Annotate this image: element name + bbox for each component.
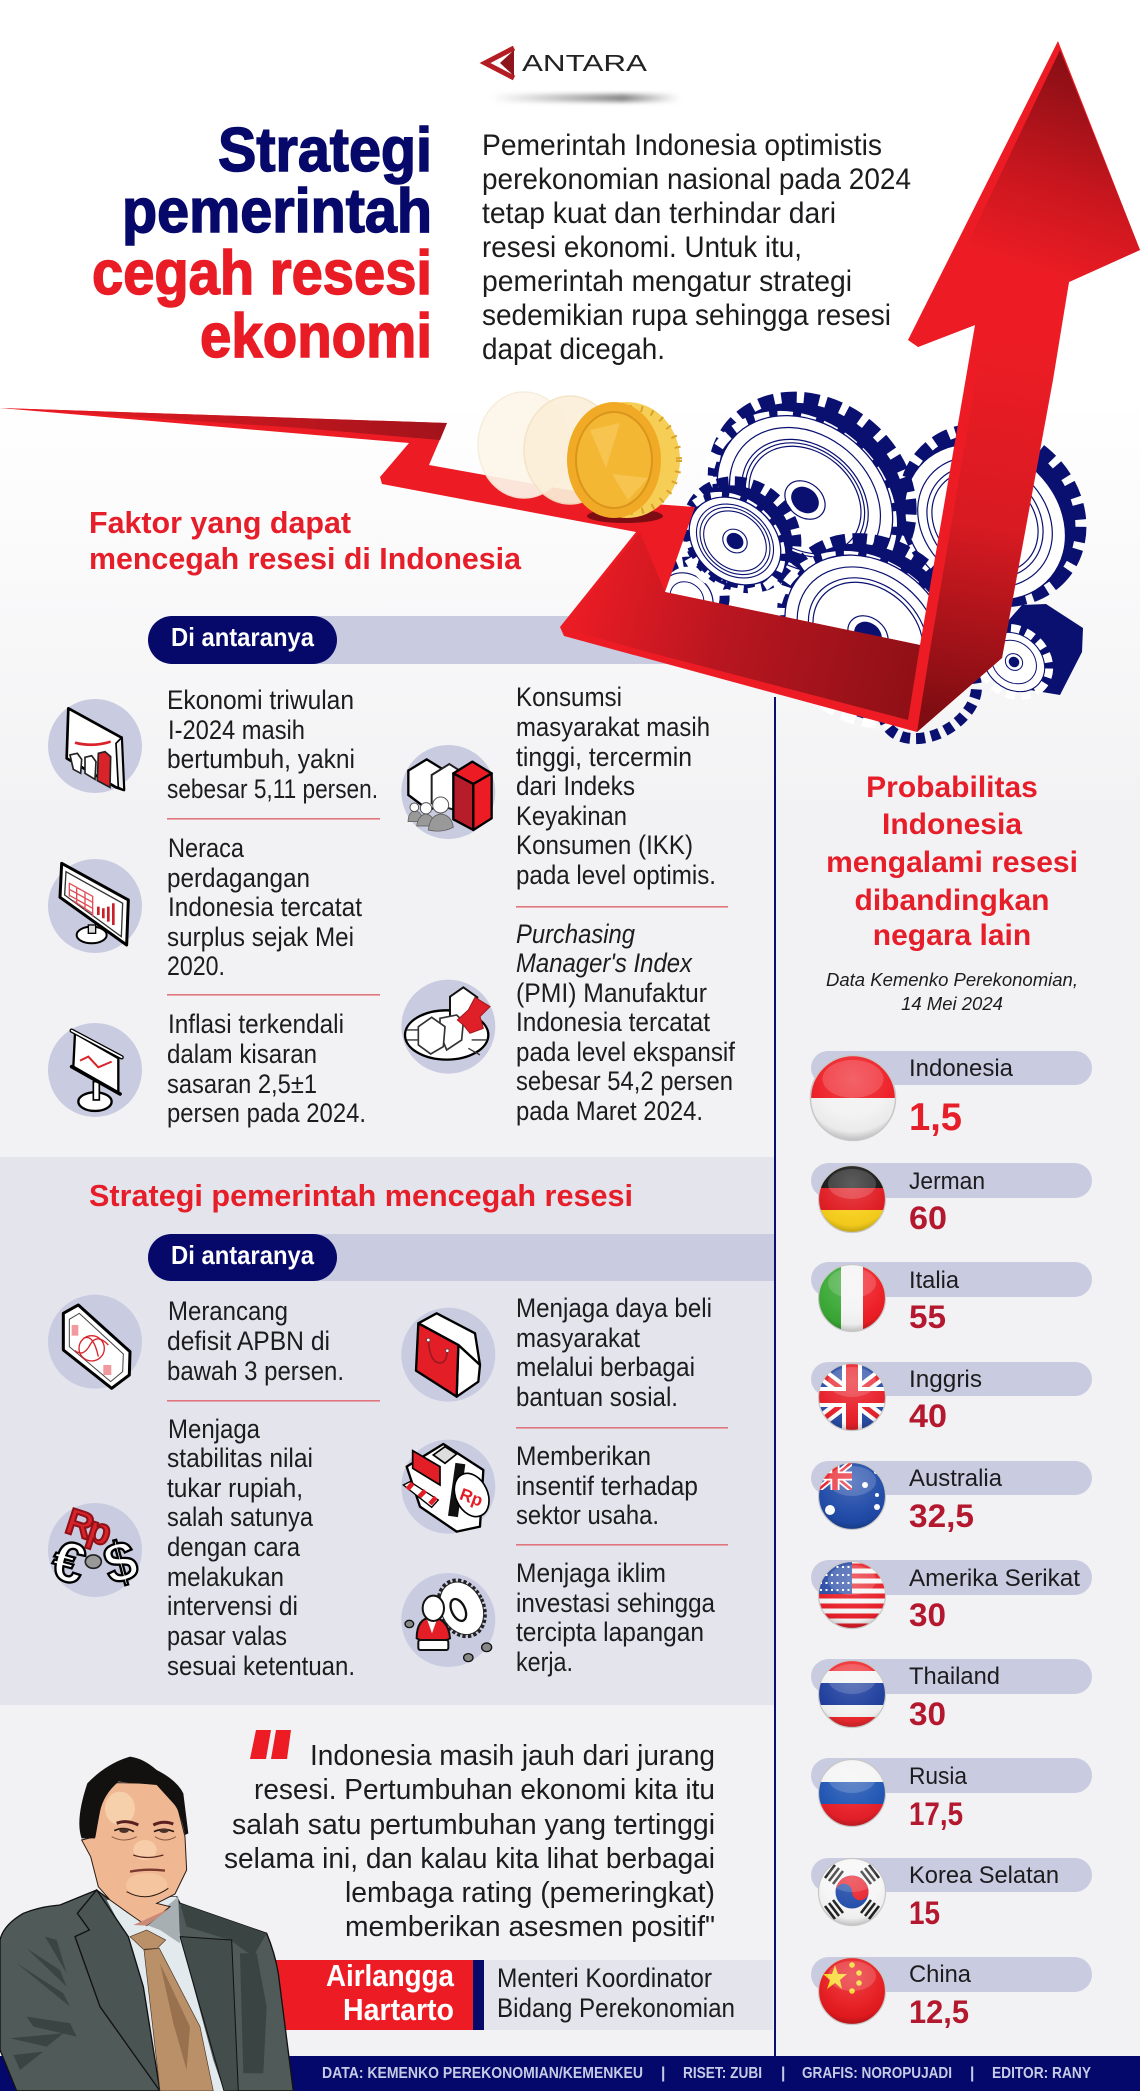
- row: Inggris: 40: [909, 1398, 947, 1434]
- band: Di antaranya (strategy): [148, 1234, 774, 1281]
- icon: investor and gear: [401, 1573, 495, 1667]
- panel: name plate: Bidang Perekonomian: [497, 1993, 735, 2023]
- coins: [478, 392, 680, 523]
- tie: [130, 1930, 213, 2091]
- flag: Germany: [818, 1165, 886, 1233]
- panel: name plate: [270, 1958, 773, 2030]
- text: investment: [516, 1558, 715, 1677]
- intro text: sedemikian rupa sehingga resesi: [482, 299, 891, 332]
- quote text: Indonesia masih jauh dari jurang: [310, 1740, 715, 1772]
- gear: right large: [870, 396, 1113, 636]
- row: Amerika Serikat: Amerika Serikat: [909, 1565, 1080, 1592]
- quote text: [224, 1740, 715, 1943]
- eyebrows: [117, 1822, 173, 1825]
- arrow band shading: [562, 532, 920, 720]
- text: PMI: sebesar 54,2 persen: [516, 1066, 733, 1096]
- shirt: [107, 1897, 224, 2091]
- quote text: resesi. Pertumbuhan ekonomi kita itu: [254, 1774, 715, 1806]
- row: Korea Selatan: Korea Selatan: [909, 1862, 1059, 1889]
- gear: small left: [647, 548, 738, 638]
- faded coin 1: [478, 392, 570, 498]
- row: China: China: [909, 1961, 972, 1988]
- row: Korea Selatan: [811, 1858, 1092, 1931]
- text: trade balance: perdagangan: [167, 863, 310, 893]
- text: inflation: persen pada 2024.: [167, 1098, 366, 1128]
- intro text: Pemerintah Indonesia optimistis: [482, 129, 882, 162]
- title: ekonomi: [200, 302, 432, 371]
- quote text: memberikan asesmen positif": [345, 1911, 715, 1943]
- text: exchange rate: intervensi di: [167, 1591, 298, 1621]
- data source note: [826, 969, 1078, 1014]
- text: exchange rate: stabilitas nilai: [167, 1443, 313, 1473]
- row: Rusia: [811, 1758, 1092, 1832]
- text: incentive: insentif terhadap: [516, 1471, 698, 1501]
- text: purchasing power: masyarakat: [516, 1323, 641, 1353]
- text: inflation: sasaran 2,5±1: [167, 1069, 317, 1099]
- text: PMI: pada Maret 2024.: [516, 1096, 703, 1126]
- text: PMI: Purchasing: [516, 919, 635, 949]
- text: PMI: Indonesia tercatat: [516, 1007, 711, 1037]
- gears illustration: [647, 362, 1113, 762]
- gear: left medium: [661, 461, 815, 614]
- icon: currencies: [45, 1500, 144, 1598]
- text: purchasing power: melalui berbagai: [516, 1352, 695, 1382]
- row: China: 12,5: [909, 1994, 969, 2030]
- hair: [79, 1757, 188, 1838]
- ANTARA logo: [462, 34, 680, 102]
- panel: strategy background: [0, 1157, 775, 1705]
- text: consumption: Konsumsi: [516, 682, 622, 712]
- portrait: Airlangga Hartarto: [0, 1757, 293, 2091]
- text: investment: tercipta lapangan: [516, 1617, 704, 1647]
- panel: name plate: Menteri Koordinator: [497, 1963, 712, 1993]
- arrow tail shading: [0, 408, 447, 440]
- intro text: pemerintah mengatur strategi: [482, 265, 852, 298]
- row: Inggris: [811, 1362, 1092, 1434]
- text: inflation: dalam kisaran: [167, 1039, 317, 1069]
- flag: Thailand: [818, 1660, 886, 1728]
- title: Strategi: [218, 116, 432, 185]
- text: investment: investasi sehingga: [516, 1588, 715, 1618]
- text: exchange rate: dengan cara: [167, 1532, 300, 1562]
- flag: Russia: [818, 1759, 886, 1827]
- title: cegah resesi: [92, 239, 432, 308]
- band: Di antaranya (factors): Di antaranya: [171, 622, 314, 652]
- text: growth: I-2024 masih: [168, 715, 305, 745]
- text: deficit: bawah 3 persen.: [167, 1356, 344, 1386]
- text: exchange rate: [167, 1414, 355, 1681]
- row: Indonesia: [810, 1051, 1092, 1141]
- data source note: Data Kemenko Perekonomian,: [826, 969, 1078, 990]
- text: consumption: dari Indeks: [516, 771, 635, 801]
- arrow silhouette: [0, 41, 1140, 732]
- text: exchange rate: pasar valas: [167, 1621, 287, 1651]
- gear: bottom right small: [966, 604, 1083, 710]
- row: Jerman: 60: [909, 1200, 947, 1236]
- icon: PMI chart: [401, 980, 495, 1074]
- icon: consumer boxes: [401, 745, 495, 839]
- band: Di antaranya (factors): [148, 616, 680, 664]
- row: Indonesia: Indonesia: [909, 1055, 1014, 1082]
- neck and face: [82, 1783, 187, 1926]
- arrow head shading: [918, 50, 1140, 347]
- heading: probability: negara lain: [873, 919, 1031, 952]
- text: deficit: defisit APBN di: [167, 1326, 330, 1356]
- flag: Australia: [818, 1462, 886, 1530]
- quote text: salah satu pertumbuhan yang tertinggi: [232, 1809, 715, 1841]
- footer bar: |: [970, 2065, 974, 2082]
- icon: monitor: [48, 859, 142, 953]
- text: purchasing power: [516, 1293, 712, 1412]
- text: exchange rate: sesuai ketentuan.: [167, 1651, 355, 1681]
- text: consumption: [516, 682, 716, 890]
- text: growth: Ekonomi triwulan: [167, 685, 354, 715]
- row: Australia: [811, 1461, 1092, 1534]
- text: exchange rate: salah satunya: [167, 1502, 313, 1532]
- red arrow: [0, 41, 1140, 732]
- lapel right: [180, 1937, 238, 2091]
- band: Di antaranya (strategy): Di antaranya: [171, 1240, 314, 1270]
- text: PMI: pada level ekspansif: [516, 1037, 736, 1067]
- text: investment: Menjaga iklim: [516, 1558, 666, 1588]
- ANTARA logo: ANTARA: [522, 50, 648, 76]
- eyes: [114, 1829, 174, 1832]
- quote mark: [250, 1730, 291, 1759]
- footer bar: |: [781, 2065, 785, 2082]
- text: consumption: pada level optimis.: [516, 860, 716, 890]
- gear: under band: [870, 646, 990, 754]
- faded coin 2: [524, 396, 616, 504]
- text: consumption: Keyakinan: [516, 801, 627, 831]
- quote text: lembaga rating (pemeringkat): [345, 1877, 715, 1909]
- gear: top large: [671, 362, 946, 633]
- intro text: resesi ekonomi. Untuk itu,: [482, 231, 802, 264]
- text: deficit: Merancang: [168, 1296, 288, 1326]
- gear: bottom centre: [741, 505, 1000, 762]
- text: purchasing power: Menjaga daya beli: [516, 1293, 712, 1323]
- text: PMI: Manager's Index: [516, 948, 694, 978]
- row: Amerika Serikat: 30: [909, 1597, 946, 1633]
- icon: shop: [401, 1440, 496, 1534]
- row: Italia: Italia: [909, 1267, 960, 1294]
- panel: name plate: Hartarto: [343, 1992, 454, 2027]
- title: [92, 116, 432, 371]
- text: incentive: Memberikan: [516, 1441, 651, 1471]
- flag: China: [818, 1957, 886, 2025]
- gold coin: [567, 402, 680, 518]
- heading: probability: [826, 771, 1078, 952]
- text: trade balance: surplus sejak Mei: [167, 922, 354, 952]
- flag: United States: [818, 1561, 886, 1629]
- arrow shaft shading: [917, 282, 1069, 732]
- footer bar: |: [661, 2065, 665, 2082]
- row: Australia: 32,5: [909, 1498, 974, 1534]
- text: purchasing power: bantuan sosial.: [516, 1382, 678, 1412]
- panel: name plate: Airlangga: [326, 1958, 455, 1993]
- row: Jerman: Jerman: [909, 1168, 985, 1195]
- heading: factors: Faktor yang dapat: [89, 505, 351, 540]
- heading: probability: mengalami resesi: [826, 846, 1078, 879]
- row: China: [811, 1957, 1092, 2030]
- text: PMI: [516, 919, 736, 1126]
- heading: factors: [89, 505, 522, 576]
- text: consumption: Konsumen (IKK): [516, 830, 693, 860]
- intro text: perekonomian nasional pada 2024: [482, 163, 911, 196]
- text: growth: [167, 685, 378, 804]
- collar: [147, 1897, 180, 1943]
- title: pemerintah: [122, 177, 432, 246]
- lapel left: [75, 1890, 160, 2091]
- icon: projector screen: [48, 1023, 142, 1117]
- text: trade balance: [167, 833, 363, 981]
- row: Rusia: Rusia: [909, 1763, 968, 1790]
- heading: probability: dibandingkan: [854, 884, 1050, 917]
- text: investment: kerja.: [516, 1647, 573, 1677]
- quote text: selama ini, dan kalau kita lihat berbagai: [224, 1843, 715, 1875]
- footer bar: GRAFIS: NOROPUJADI: [802, 2065, 952, 2082]
- icon: currencies: p: [83, 1507, 117, 1554]
- suit: [0, 1890, 293, 2091]
- data source note: 14 Mei 2024: [901, 993, 1003, 1014]
- text: exchange rate: tukar rupiah,: [167, 1473, 303, 1503]
- text: consumption: masyarakat masih: [516, 712, 710, 742]
- row: Thailand: 30: [909, 1696, 946, 1732]
- row: Italia: 55: [909, 1299, 946, 1335]
- row: Amerika Serikat: [811, 1560, 1092, 1633]
- intro text: tetap kuat dan terhindar dari: [482, 197, 836, 230]
- text: incentive: [516, 1441, 698, 1530]
- text: inflation: [167, 1009, 366, 1128]
- text: growth: bertumbuh, yakni: [167, 744, 355, 774]
- footer bar: RISET: ZUBI: [683, 2065, 762, 2082]
- text: exchange rate: melakukan: [167, 1562, 284, 1592]
- icon: currencies: R: [61, 1500, 99, 1548]
- text: consumption: tinggi, tercermin: [516, 742, 692, 772]
- flag: Italy: [818, 1264, 886, 1332]
- heading: probability: Probabilitas: [866, 771, 1038, 804]
- row: Inggris: Inggris: [909, 1366, 982, 1393]
- row: Australia: Australia: [909, 1465, 1003, 1492]
- intro text: [482, 129, 911, 366]
- row: Indonesia: 1,5: [909, 1096, 962, 1139]
- text: inflation: Inflasi terkendali: [168, 1009, 344, 1039]
- suit shadows: [10, 1903, 267, 2073]
- icon: growth chart board: [48, 699, 142, 793]
- intro text: dapat dicegah.: [482, 333, 665, 366]
- row: Thailand: [811, 1659, 1092, 1732]
- text: PMI: (PMI) Manufaktur: [516, 978, 707, 1008]
- footer bar: DATA: KEMENKO PEREKONOMIAN/KEMENKEU: [322, 2065, 643, 2082]
- footer bar: EDITOR: RANY: [992, 2065, 1092, 2082]
- heading: factors: mencegah resesi di Indonesia: [89, 541, 522, 576]
- row: Thailand: Thailand: [909, 1663, 1000, 1690]
- text: trade balance: 2020.: [167, 951, 225, 981]
- row: Italia: [811, 1262, 1092, 1335]
- mouth and nose: [133, 1855, 163, 1857]
- text: exchange rate: Menjaga: [168, 1414, 260, 1444]
- heading: probability: Indonesia: [882, 808, 1022, 841]
- icon: shopping bag: [401, 1308, 495, 1402]
- flag: Indonesia: [810, 1055, 896, 1141]
- text: growth: sebesar 5,11 persen.: [167, 774, 378, 804]
- centre divider line: [774, 697, 776, 2057]
- icon: currencies: €: [45, 1529, 92, 1598]
- row: Rusia: 17,5: [909, 1796, 963, 1832]
- text: deficit: [167, 1296, 344, 1386]
- heading: strategy: Strategi pemerintah mencegah resesi: [89, 1178, 633, 1213]
- text: trade balance: Indonesia tercatat: [168, 892, 363, 922]
- icon: budget note: [48, 1295, 142, 1389]
- text: trade balance: Neraca: [168, 833, 244, 863]
- text: incentive: sektor usaha.: [516, 1500, 659, 1530]
- row: Korea Selatan: 15: [909, 1895, 940, 1931]
- footer bar: [0, 2056, 1140, 2091]
- flag: United Kingdom: [818, 1363, 886, 1431]
- icon: currencies: $: [97, 1528, 144, 1597]
- flag: South Korea: [818, 1858, 886, 1926]
- icon: shop: Rp: [457, 1484, 486, 1511]
- row: Jerman: [811, 1163, 1092, 1236]
